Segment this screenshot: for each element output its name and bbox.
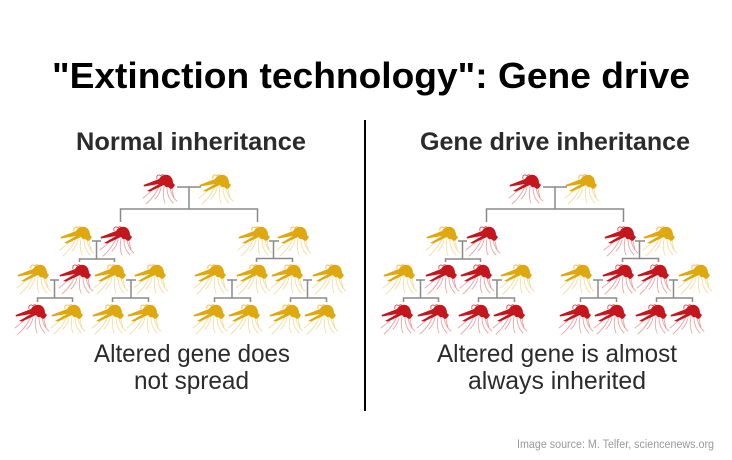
heading: gene drive inheritance: Gene drive inheritance <box>420 128 690 156</box>
mosquitoes: normal generation 4 <box>15 305 338 334</box>
caption: gene drive: always inherited <box>468 367 646 395</box>
panel: normal inheritance <box>15 128 346 395</box>
mosquitoes: gene drive generation 1 <box>509 175 599 204</box>
panel: gene drive inheritance <box>381 128 712 395</box>
mosquitoes: gene drive generation 4 <box>381 305 704 334</box>
mosquitoes: normal generation 3 <box>17 265 346 294</box>
title: "Extinction technology": Gene drive <box>52 55 690 96</box>
image source credit: Image source: M. Telfer, sciencenews.org <box>517 439 714 451</box>
caption: normal: Altered gene does <box>94 340 290 368</box>
caption: gene drive <box>437 340 677 395</box>
divider <box>364 120 366 411</box>
caption: gene drive: Altered gene is almost <box>437 340 677 368</box>
mosquitoes: normal generation 1 <box>143 175 233 204</box>
caption: normal <box>94 340 290 395</box>
caption: normal: not spread <box>134 367 249 395</box>
family tree connectors: gene drive <box>404 187 692 302</box>
family tree connectors: normal <box>38 187 326 302</box>
heading: normal inheritance: Normal inheritance <box>76 128 306 156</box>
mosquitoes: gene drive generation 2 <box>426 227 677 256</box>
mosquitoes: gene drive generation 3 <box>383 265 712 294</box>
mosquitoes: normal generation 2 <box>60 227 311 256</box>
